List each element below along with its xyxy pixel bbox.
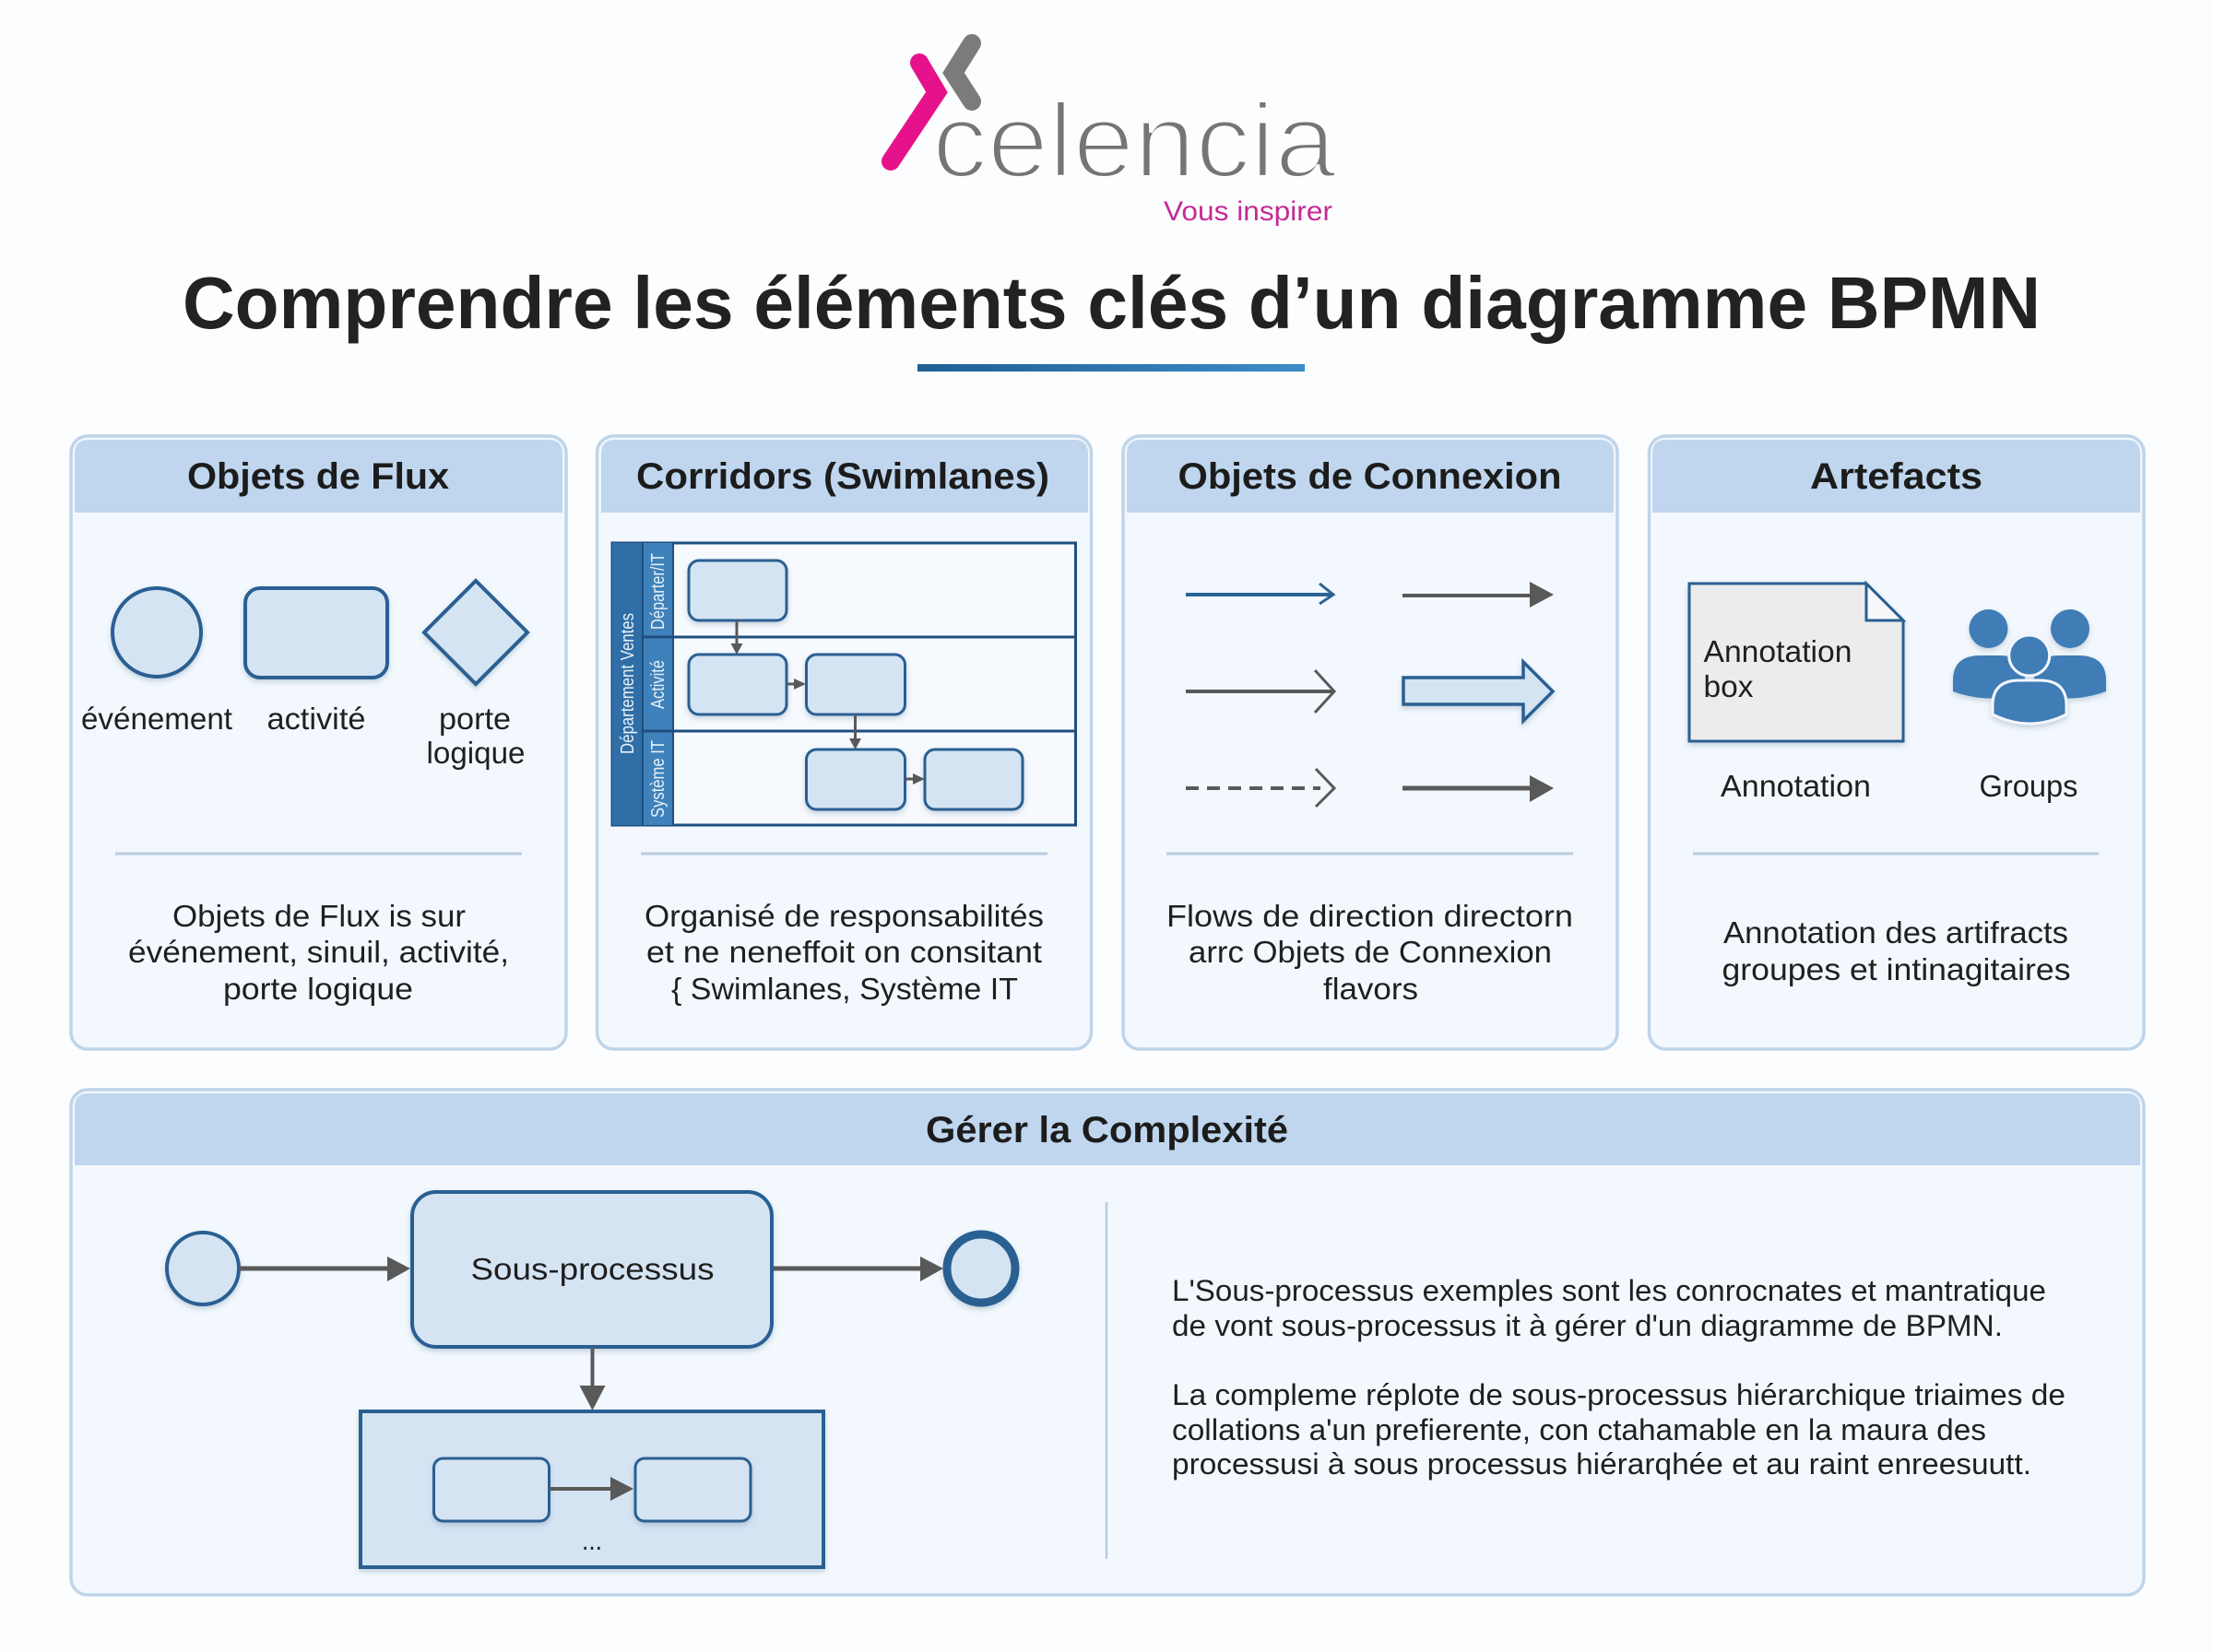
- icon: event circle: [112, 588, 201, 677]
- description text: porte logique: [223, 972, 413, 1006]
- panel header band: [75, 440, 562, 513]
- inner task 1: [433, 1458, 550, 1521]
- lane label 1: Départer/IT: [648, 553, 669, 630]
- explanation text: La compleme réplote de sous-processus hiérarchique triaimes de: [1172, 1378, 2065, 1411]
- description text: arrc Objets de Connexion: [1189, 935, 1552, 969]
- explanation text: de vont sous-processus it à gérer d'un diagramme de BPMN.: [1172, 1309, 2003, 1342]
- arrow to sub-process: [240, 1257, 410, 1281]
- sub-process label: Sous-processus: [470, 1252, 714, 1286]
- card background: [71, 1090, 2144, 1595]
- explanation text: collations a'un prefierente, con ctahamable en la maura des: [1172, 1413, 1986, 1446]
- heading: Objets de Flux: [187, 456, 449, 497]
- explanation text: processusi à sous processus hiérarqhée et au raint enreesuutt.: [1172, 1447, 2031, 1481]
- description text: Objets de Flux is sur: [172, 899, 466, 933]
- description text: { Swimlanes, Système IT: [671, 972, 1018, 1006]
- sub-process box: [412, 1192, 772, 1347]
- label: porte logique: logique: [426, 736, 526, 770]
- lane label 3: Système IT: [648, 740, 669, 818]
- description text: flavors: [1323, 972, 1418, 1006]
- heading: Corridors (Swimlanes): [636, 456, 1049, 497]
- icon: gray chevron: [953, 43, 972, 101]
- description text: Annotation des artifracts: [1723, 915, 2068, 950]
- panel header band: [75, 1093, 2140, 1165]
- description text: groupes et intinagitaires: [1722, 952, 2071, 986]
- card background: [1123, 436, 1617, 1049]
- swimlane arrows: [730, 620, 925, 785]
- icon: pink chevron: [891, 63, 937, 161]
- heading: Gérer la Complexité: [926, 1110, 1288, 1150]
- swimlane tasks: [689, 560, 1023, 809]
- arrow: open gray: [1186, 670, 1334, 713]
- panel: Gérer la Complexité: [71, 1090, 2144, 1595]
- arrow: solid gray 2: [1402, 775, 1554, 802]
- description text: Organisé de responsabilités: [645, 899, 1044, 933]
- card background: [598, 436, 1092, 1049]
- panel: Objets de Flux: [71, 436, 566, 1049]
- swimlane diagram: [612, 543, 1076, 825]
- pool label column: [612, 543, 643, 825]
- pool frame: [612, 543, 1075, 825]
- logo wordmark: celencia: [932, 83, 1337, 200]
- logo: Xcelencia: [891, 43, 1337, 227]
- arrow to end event: [774, 1257, 943, 1281]
- title underline: [917, 364, 1305, 372]
- title: Comprendre les éléments clés d’un diagramme BPMN: [183, 262, 2041, 344]
- panel header band: [601, 440, 1088, 513]
- panel header band: [1652, 440, 2140, 513]
- label: événement: événement: [81, 702, 232, 736]
- panel: Artefacts: [1649, 436, 2144, 1049]
- icon: group of people: [1953, 609, 2106, 724]
- lane label 2: Activité: [648, 660, 669, 709]
- panel: Corridors (Swimlanes): [598, 436, 1092, 1049]
- panel header band: [1127, 440, 1614, 513]
- icon: gateway diamond: [424, 581, 527, 684]
- annotation box text: Annotation: [1704, 634, 1852, 668]
- icon: activity rectangle: [245, 588, 387, 678]
- label: activité: activité: [267, 702, 365, 736]
- ellipsis: ...: [582, 1526, 602, 1556]
- card background: [71, 436, 566, 1049]
- description text: Flows de direction directorn: [1166, 899, 1573, 933]
- label: porte logique: porte: [439, 702, 511, 736]
- description text: événement, sinuil, activité,: [128, 935, 509, 969]
- lane label column: [643, 543, 673, 825]
- icon: annotation document: [1689, 584, 1903, 741]
- heading: Objets de Connexion: [1178, 456, 1562, 497]
- arrow: sequence flow blue: [1186, 584, 1333, 604]
- expanded sub-process: [361, 1411, 823, 1567]
- arrow: block blue: [1403, 662, 1553, 721]
- logo tagline: Vous inspirer: [1164, 196, 1332, 227]
- panel: Objets de Connexion: [1123, 436, 1617, 1049]
- inner arrow: [550, 1477, 633, 1501]
- label: Annotation: Annotation: [1721, 769, 1871, 803]
- arrow: solid gray 1: [1402, 582, 1554, 608]
- pool label: Département Ventes: [618, 613, 638, 754]
- arrow down to expansion: [579, 1348, 605, 1410]
- heading: Artefacts: [1810, 456, 1982, 497]
- arrow: dashed message flow: [1186, 769, 1334, 807]
- description text: et ne neneffoit on consitant: [646, 935, 1042, 969]
- annotation box text: box: [1704, 669, 1754, 703]
- card background: [1649, 436, 2144, 1049]
- label: Groups: Groups: [1979, 769, 2078, 803]
- explanation text: L'Sous-processus exemples sont les conrocnates et mantratique: [1172, 1274, 2046, 1307]
- inner task 2: [635, 1458, 751, 1521]
- sub-process diagram: [167, 1192, 1015, 1567]
- start event: [167, 1233, 239, 1304]
- end event: [947, 1234, 1015, 1303]
